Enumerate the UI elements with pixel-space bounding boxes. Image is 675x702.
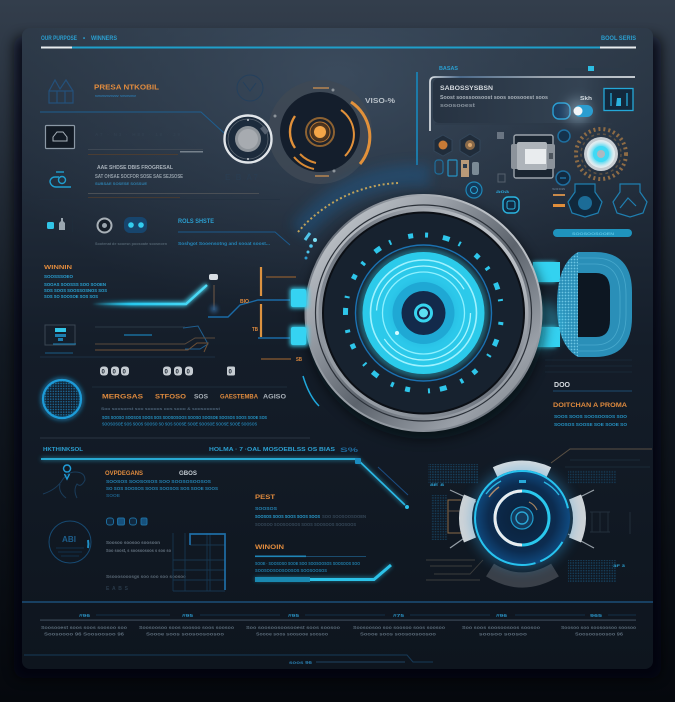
column five: soosoo soosoo [479,632,528,636]
small orange labels: TB [252,327,258,333]
subheading with connector [95,219,290,246]
text block: pest: SOOSOO SOOSOOSOS SOOS SOOSOOS SOOSOOS [255,522,356,527]
card: top right info: BASAS [439,66,458,72]
text block: lower list: Soosoo soosoo soosoon [106,540,160,545]
column five [462,613,541,636]
knob dial [224,116,272,162]
text block: winoin: SOOE · SOOSOSO SOOE SOO SOOSOOSOS SOOSOOS SOO [255,561,361,566]
text block: winning [44,265,107,299]
text block: description: SUBSAE SOSESE SOSSUE [95,181,147,186]
text block: description: SAT OHSAE SOCFOR SOSE SAE SEJSOSE [95,174,184,180]
numeric pills: 0 [122,370,126,376]
card: top right info [430,66,635,131]
section header row: HOLMA · 7 ·OAL MOSOEBLSS OS BIAS [209,447,335,453]
numeric pills: 0 [102,370,106,376]
toggle controls [553,99,593,123]
small orange labels: BIO [240,299,249,305]
text block: right lower: DOO [554,382,571,389]
column one: Soosooest soos soos soosoo soo [41,625,128,630]
column six: Soosoosoosoo 96 [575,632,624,636]
faint stats text: E B A7 [225,173,259,182]
icon row: controls [47,216,147,233]
orange small bars [552,186,566,207]
column one [41,613,128,636]
footer divider [22,601,653,603]
text block: mid heading: SOS SOOSO SOOSOS SOOS SOS SOOSOSOOS SOOSO SOOSOE SOOSOS SOOS SOOE SOS [102,415,267,420]
header bar: BOOL SERIS [601,36,636,42]
card: top right info: soosooest [440,103,475,109]
text block: right lower: SOOSOS SOOSE SOE SOOE SO [554,422,628,427]
header bar: WINNERS [91,36,117,42]
column one: Soosoooo 96 Soosoosoo 96 [44,632,125,636]
text block: mid heading: GAESTEMBA [220,394,258,400]
dotted side patches and wires [426,449,652,582]
column one: #96 [79,613,91,618]
top orange dial [268,80,372,184]
card: top right info: SABOSSYSBSN [440,85,493,92]
subheading with connector: ROLS SHSTE [178,219,214,225]
chart lines [40,327,215,357]
section header row [43,447,359,454]
text block: mid heading: Soo soosoest soo soooos oos sooo & soosoooost [101,406,221,411]
header bar: OUR PURPOSE [41,36,77,42]
text block: right lower [553,382,632,427]
card: top right info: Skh [580,96,592,102]
mini round badges [556,130,570,185]
hexagon icons [434,134,480,157]
small tile icons [435,160,479,177]
dotted side patches and wires: 3F 3 [613,563,626,568]
header bar: • [83,36,85,42]
text block: winoin: SOOSOOSOOSOOSOS SOOSOOSOS [255,568,327,573]
shield icons [568,184,647,217]
text block: overview: OVPDEGANS [105,471,143,477]
round cyan icons [466,182,519,213]
text block: lower list: Soo soost, s soosoosoos s soo so [106,548,171,553]
text block: lower list: E A B S [106,586,129,592]
column three: #95 [288,613,300,618]
vertical divider [416,72,418,165]
column six: 965 [590,613,603,618]
divider lines two [40,193,280,200]
numeric pills: 0 [176,370,180,376]
bright diagonal rule [41,458,409,509]
heading: orange title: wwwwww wwww [94,93,137,98]
mini screen widget [45,325,76,353]
numeric pills: 0 [164,370,168,376]
text block: winning: WINNIN [44,265,72,271]
text block: lower list: Ssooosooosgs soo soo soo soosoo [106,574,186,579]
icon: cyan cloud [50,172,71,187]
text block: pest: PEST [255,495,275,501]
dotted side patches and wires: 8E 8 [430,482,445,487]
small orange labels [240,299,302,363]
icon: house outline [49,80,73,103]
column six: Soosoo soo soosoosoo soosoo [561,625,637,630]
text block: winning: SOOSSSOEO [44,274,73,279]
text block: winning: SOS SOOS SOOSSOSNOS SOS [44,288,107,293]
cyan pill label [553,229,632,237]
text block: description: AAE SHDSE DBIS FROGRESAL [97,165,173,171]
icon: location map [43,465,85,498]
text block: winoin [255,544,366,573]
text block: overview: SO SOS SOOSOS SOOS SOOSOS SOS SOOE SOOS [106,486,218,491]
faint text row: A7 · N3 · H88 · 18 · 29 [95,132,180,137]
text block: overview: SOOE [106,493,120,498]
text block: pest: SOO SOOSOOSOOEN [322,514,366,519]
subheading with connector: Sootenat de sooesn poosoate soosnoen [95,242,168,246]
text block: winoin: WINOIN [255,544,284,551]
subheading with connector: Soshgot Sooensotng and sooat soost... [178,241,270,246]
numeric pills [100,366,235,376]
icon box: right figure [604,88,633,110]
text block: pest: SOOSOS [255,506,277,511]
text block: pest: SOOSOS SOOS SOOS SOOS SOOS [255,514,320,519]
bottom columns [40,613,637,636]
column four: #75 [393,613,405,618]
text block: right lower: SOOS SOOS SOOSOOSOS SOO [554,414,628,419]
column three [246,613,341,636]
numeric pills: 0 [112,370,116,376]
dial readout label: VISO-% [365,98,396,105]
text block: lower list [106,540,186,592]
column two: Soosoosoo soos soosoo soos soosoo [139,625,235,630]
header bar [41,36,636,48]
text block: description [95,165,184,186]
column two: Soooe soos soosoosoosoo [146,632,225,636]
numeric pills: 0 [228,370,232,376]
column three: Soo soosoosoosooest soos soosoo [246,625,341,630]
D-shaped module [533,252,632,372]
column four [353,613,446,636]
footer strip: soos 96 [289,660,313,665]
icon row: small rounds [106,518,147,525]
round cyan icons: aoa [496,189,510,194]
connector line to knob [40,112,224,133]
text block: pest [255,495,366,527]
text block: mid heading: SOOSOSOE SOS SOOS SOOSO SO SOS SOOSE SOOE SOOSOE SOOSE SOOE SOOSOS [102,422,257,426]
sphere: dotted globe [42,379,82,419]
small orange labels: SB [296,357,302,363]
heading: orange title: PRESA NTKOBIL [94,84,160,92]
data glyph ring [346,235,502,391]
text block: right lower: DOITCHAN A PROMA [553,402,627,409]
bright lower bar [255,565,391,582]
main dial [298,175,562,439]
bright swoosh bar [92,285,207,304]
text block: overview: SOOSOS SOOSOSOS SOO SOOSOSOOSOS [106,479,211,484]
text block: mid heading: AGISO [263,394,286,400]
text block: mid heading: SOS [194,394,209,400]
column five: #96 [496,613,508,618]
column five: Soo soos soosoosoos soosoo [462,625,541,630]
text block: mid heading: MERGSAS [102,394,144,400]
section header row: S% [340,448,359,454]
column four: Soosoosoo soo soosoo soos soosoo [353,625,446,630]
grid chart [173,533,225,591]
icon: round badge: ABI [62,535,76,544]
column two [139,613,235,636]
white pads [466,468,580,580]
column three: Soooe soos soosooe soosoo [256,632,329,636]
circuit connectors [183,267,296,359]
column two: #95 [182,613,194,618]
text block: overview: GBOS [179,471,197,477]
left glowing tabs [290,288,308,346]
numeric pills: 0 [186,370,190,376]
divider lines one [88,149,203,155]
chip device [497,132,555,182]
small glowing dial [576,129,626,179]
text block: mid heading [40,387,310,438]
bottom dial [426,449,652,582]
icon: framed panel [46,126,74,148]
text block: winning: SOOAS SOOSSS SOO SOOEN [44,282,106,287]
card: top right info: Soost soossoosoost soos soosooest soos [440,95,548,101]
cyan pill label: SOOSOOSOOEN [572,231,614,236]
column six [561,613,637,636]
section header row: HKTHINKSOL [43,447,84,453]
text block: winning: SOS SO SOOSOE SOS SOS [44,294,98,299]
text block: mid heading: STFOSO [155,394,186,400]
cyan core [358,248,488,378]
heading: orange title [94,84,160,98]
footer strip [24,655,433,665]
orange small bars: sooa [552,186,566,191]
text block: overview [105,471,218,498]
column four: Soooe soos soosoosoosoo [360,632,437,636]
icon: faint dial [237,75,263,101]
icon: round badge [49,521,91,563]
dial back glow and gold dotted arc [298,175,562,406]
